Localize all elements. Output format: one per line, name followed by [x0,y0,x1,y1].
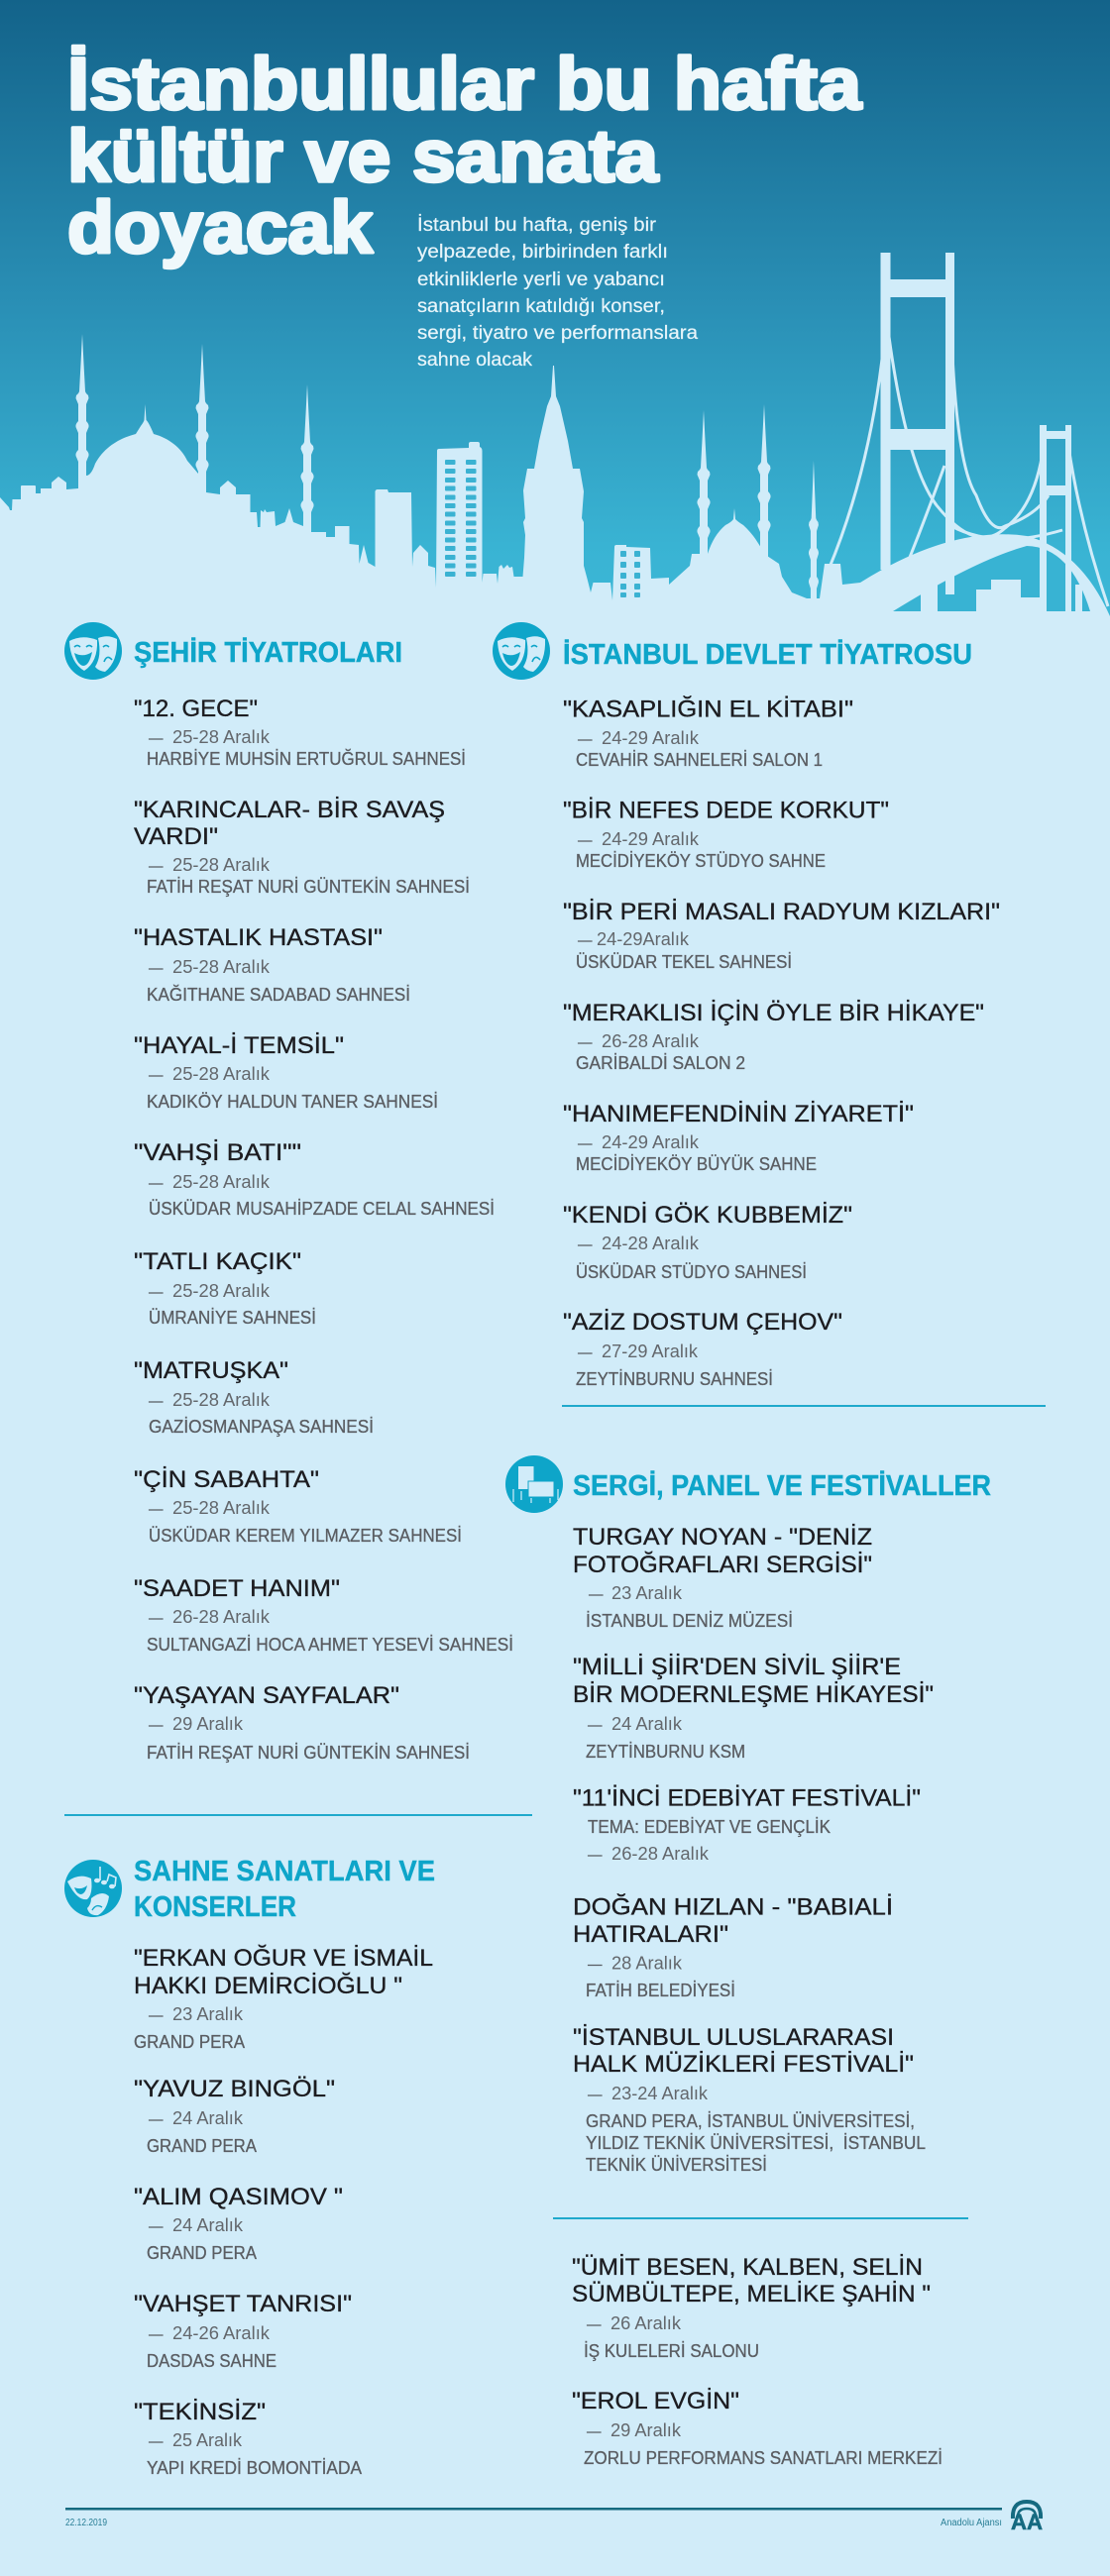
event: Doğan Hızlan [573,1894,893,2000]
icon: exhibition panels [505,1455,563,1513]
minaret 6 [809,461,819,629]
event: Vahşet Tanrısı [134,2291,352,2371]
bridge tower 2 [1040,425,1071,611]
event: Alim Qasimov: — [149,2219,164,2235]
event: Milli Şiir'den Sivil Şiir'e: 24 Aralık [611,1713,683,1734]
event: Ümit Besen: — [587,2317,602,2333]
event: Hastalık Hastası: "HASTALIK HASTASI" [134,924,383,951]
event: Saadet Hanım: — [149,1611,164,1627]
event: İstanbul Uluslararası Halk Müzikleri Festivali: HALK MÜZİKLERİ FESTİVALİ" [573,2051,914,2078]
event: Bir Peri Masalı [563,899,1000,972]
event: Vahşet Tanrısı: 24-26 Aralık [172,2322,271,2343]
heading [134,1856,435,1923]
event: Erkan Oğur: "ERKAN OĞUR VE İSMAİL [134,1945,433,1972]
event: Meraklısı İçin [563,1000,984,1073]
event: Erkan Oğur: 23 Aralık [172,2003,244,2024]
buildings under the arch [921,567,1082,611]
event: 11'inci Edebiyat Festivali: — [588,1848,603,1864]
event: Erkan Oğur: — [149,2008,164,2024]
event: Alim Qasimov: 24 Aralık [172,2214,244,2235]
intro text [417,215,698,371]
event: Vahşet Tanrısı: "VAHŞET TANRISI" [134,2291,352,2317]
event: Hayal-i Temsil: "HAYAL-İ TEMSİL" [134,1032,344,1059]
event: Karıncalar: VARDI" [134,823,218,850]
icon: masks and music notes [64,1860,122,1917]
event: Hayal-i Temsil: KADIKÖY HALDUN TANER SAHNESİ [147,1092,438,1112]
event: 11'inci Edebiyat Festivali: TEMA: EDEBİYAT VE GENÇLİK [588,1817,831,1837]
heading: SAHNE SANATLARI VE [134,1856,435,1887]
event: Hanımefendinin Ziyareti: MECİDİYEKÖY BÜYÜK SAHNE [576,1154,817,1174]
event: Saadet Hanım: 26-28 Aralık [172,1606,271,1627]
event: Ümit Besen [572,2254,931,2361]
event: Matruşka [134,1357,374,1437]
event: Kendi Gök Kubbemiz [563,1202,852,1282]
event: 12. Gece: 25-28 Aralık [172,726,271,747]
event: Meraklısı İçin: GARİBALDİ SALON 2 [576,1053,745,1073]
minaret 2 [196,344,208,512]
event: Ümit Besen: 26 Aralık [610,2312,682,2333]
event: Tekinsiz: — [149,2434,164,2450]
icon: theatre masks [493,622,550,680]
event: Tatlı Kaçık [134,1248,316,1328]
event: İstanbul Uluslararası Halk Müzikleri Festivali: — [588,2088,603,2103]
event: Erkan Oğur [134,1945,433,2052]
event: 11'inci Edebiyat Festivali [573,1785,921,1864]
panel: Sahne Sanatları ve Konserler [64,1856,435,2478]
event: Çin Sabahta [134,1466,462,1546]
intro text: sahne olacak [417,350,533,371]
event: 12. Gece: "12. GECE" [134,696,258,722]
footer [65,2502,1043,2534]
title [67,43,862,268]
event: Erol Evgin: — [587,2424,602,2440]
minaret 1 [75,334,89,502]
event: Doğan Hızlan: DOĞAN HIZLAN - "BABIALİ [573,1894,893,1920]
event: Turgay Noyan: İSTANBUL DENİZ MÜZESİ [586,1611,793,1631]
event: Alim Qasimov: GRAND PERA [147,2243,257,2263]
event: Karıncalar: 25-28 Aralık [172,854,271,875]
event: Vahşi Batı: — [149,1176,164,1192]
event: İstanbul Uluslararası Halk Müzikleri Festivali: 23-24 Aralık [611,2083,709,2103]
event: Bir Peri Masalı: ÜSKÜDAR TEKEL SAHNESİ [576,952,792,972]
event: Bir Nefes Dede Korkut: 24-29 Aralık [602,828,700,849]
event: Hastalık Hastası: KAĞITHANE SADABAD SAHNESİ [147,984,410,1005]
event: Milli Şiir'den Sivil Şiir'e [573,1654,934,1762]
heading: İSTANBUL DEVLET TİYATROSU [563,639,972,671]
event: Yavuz Bingöl: 24 Aralık [172,2107,244,2128]
event: Hastalık Hastası: — [149,961,164,977]
event: Kasaplığın El Kitabı: "KASAPLIĞIN EL KİTABI" [563,696,853,723]
event: Bir Peri Masalı: 24-29Aralık [597,928,690,949]
event: Hanımefendinin Ziyareti: 24-29 Aralık [602,1131,700,1152]
event: Ümit Besen: İŞ KULELERİ SALONU [584,2341,759,2361]
event: Bir Peri Masalı: — [578,933,593,949]
event: Hayal-i Temsil: — [149,1068,164,1084]
event: Hayal-i Temsil: 25-28 Aralık [172,1063,271,1084]
event: Yavuz Bingöl: — [149,2112,164,2128]
event: Tatlı Kaçık: 25-28 Aralık [172,1280,271,1301]
title: kültür ve sanata [67,115,659,197]
event: Vahşi Batı [134,1139,495,1219]
event: Matruşka: 25-28 Aralık [172,1389,271,1410]
event: Milli Şiir'den Sivil Şiir'e: BİR MODERNLEŞME HİKAYESİ" [573,1681,934,1708]
event: Tekinsiz: 25 Aralık [172,2429,243,2450]
heading: SERGİ, PANEL VE FESTİVALLER [573,1470,991,1502]
event: Bir Nefes Dede Korkut: — [578,833,593,849]
event: Karıncalar [134,797,470,897]
event: Yavuz Bingöl: GRAND PERA [147,2136,257,2156]
event: Saadet Hanım: SULTANGAZİ HOCA AHMET YESEVİ SAHNESİ [147,1635,513,1655]
event: Tatlı Kaçık: ÜMRANİYE SAHNESİ [149,1308,316,1328]
event: Vahşi Batı: ÜSKÜDAR MUSAHİPZADE CELAL SAHNESİ [149,1199,495,1219]
skyline silhouette [0,366,1110,634]
event: Aziz Dostum Çehov: — [578,1345,593,1361]
event: Hanımefendinin Ziyareti: — [578,1136,593,1152]
event: Meraklısı İçin: — [578,1035,593,1051]
event: Kendi Gök Kubbemiz: 24-28 Aralık [602,1233,700,1253]
event: Aziz Dostum Çehov: 27-29 Aralık [602,1341,699,1361]
event: Aziz Dostum Çehov: ZEYTİNBURNU SAHNESİ [576,1369,773,1389]
event: Erol Evgin: ZORLU PERFORMANS SANATLARI MERKEZİ [584,2448,943,2468]
event: Matruşka: "MATRUŞKA" [134,1357,288,1384]
event: Tekinsiz: YAPI KREDİ BOMONTİADA [147,2458,362,2478]
minaret 3 [301,384,313,553]
event: Turgay Noyan: 23 Aralık [611,1582,683,1603]
event: Yaşayan Sayfalar: — [149,1718,164,1734]
event: Karıncalar: "KARINCALAR- BİR SAVAŞ [134,797,445,823]
tower block windows [445,460,640,597]
event: Yavuz Bingöl [134,2076,335,2156]
intro text: İstanbul bu hafta, geniş bir [417,215,657,236]
event: Turgay Noyan: FOTOĞRAFLARI SERGİSİ" [573,1552,872,1578]
event: Matruşka: — [149,1394,164,1410]
event: Karıncalar: — [149,859,164,875]
event: Aziz Dostum Çehov: "AZİZ DOSTUM ÇEHOV" [563,1309,842,1336]
event: Kendi Gök Kubbemiz: "KENDİ GÖK KUBBEMİZ" [563,1202,852,1229]
event: Kasaplığın El Kitabı: — [578,732,593,748]
event: Turgay Noyan [573,1524,872,1631]
event: 12. Gece: — [149,731,164,747]
intro text: etkinliklerle yerli ve yabancı [417,269,665,290]
event: İstanbul Uluslararası Halk Müzikleri Festivali [573,2024,926,2175]
event: Hastalık Hastası [134,924,410,1005]
arch opening under bridge approach [893,546,1090,611]
event: Kendi Gök Kubbemiz: — [578,1237,593,1253]
event: Tekinsiz: "TEKİNSİZ" [134,2399,266,2425]
event: 12. Gece: HARBİYE MUHSİN ERTUĞRUL SAHNESİ [147,748,466,769]
event: Yaşayan Sayfalar [134,1682,470,1763]
event: Çin Sabahta: — [149,1502,164,1518]
event: Yavuz Bingöl: "YAVUZ BINGÖL" [134,2076,335,2102]
event: 12. Gece [134,696,466,769]
event: Saadet Hanım: "SAADET HANIM" [134,1575,340,1602]
heading: KONSERLER [134,1891,296,1923]
event: Doğan Hızlan: HATIRALARI" [573,1921,728,1948]
event: Milli Şiir'den Sivil Şiir'e: — [588,1718,603,1734]
event: Hanımefendinin Ziyareti: "HANIMEFENDİNİN ZİYARETİ" [563,1101,914,1127]
minaret 4 [698,410,710,579]
event: Bir Peri Masalı: "BİR PERİ MASALI RADYUM KIZLARI" [563,899,1000,925]
event: Yaşayan Sayfalar: "YAŞAYAN SAYFALAR" [134,1682,399,1709]
icon: AA logo: AA [1011,2510,1043,2534]
event: Ümit Besen: "ÜMİT BESEN, KALBEN, SELİN [572,2254,923,2281]
event: Doğan Hızlan: — [588,1958,603,1974]
event: Vahşi Batı: "VAHŞİ BATI"" [134,1139,301,1166]
event: Milli Şiir'den Sivil Şiir'e: ZEYTİNBURNU KSM [586,1742,745,1762]
event: Vahşi Batı: 25-28 Aralık [172,1171,271,1192]
event: İstanbul Uluslararası Halk Müzikleri Festivali: GRAND PERA, İSTANBUL ÜNİVERSİTESİ, [586,2111,915,2131]
event: Çin Sabahta: "ÇİN SABAHTA" [134,1466,319,1493]
heading: ŞEHİR TİYATROLARI [134,637,402,669]
event: Bir Nefes Dede Korkut: MECİDİYEKÖY STÜDYO SAHNE [576,851,826,871]
event: Tatlı Kaçık: "TATLI KAÇIK" [134,1248,301,1275]
event: İstanbul Uluslararası Halk Müzikleri Festivali: "İSTANBUL ULUSLARARASI [573,2024,894,2051]
event: Bir Nefes Dede Korkut [563,797,889,871]
event: Doğan Hızlan: FATİH BELEDİYESİ [586,1981,735,2000]
event: Turgay Noyan: TURGAY NOYAN - "DENİZ [573,1524,872,1551]
event: Karıncalar: FATİH REŞAT NURİ GÜNTEKİN SAHNESİ [147,877,470,897]
event: Milli Şiir'den Sivil Şiir'e: "MİLLİ ŞİİR'DEN SİVİL ŞİİR'E [573,1654,901,1680]
event: Kendi Gök Kubbemiz: ÜSKÜDAR STÜDYO SAHNESİ [576,1262,807,1282]
panel: Sergi, Panel ve Festivaller [505,1455,991,2175]
panel: Şehir Tiyatroları [64,622,513,1763]
event: Doğan Hızlan: 28 Aralık [611,1952,683,1974]
event: Ümit Besen: SÜMBÜLTEPE, MELİKE ŞAHİN " [572,2281,931,2308]
intro text: sanatçıların katıldığı konser, [417,296,665,317]
event: Vahşet Tanrısı: — [149,2327,164,2343]
minaret 5 [757,404,771,573]
event: Kasaplığın El Kitabı: 24-29 Aralık [602,727,700,748]
event: Çin Sabahta: 25-28 Aralık [172,1497,271,1518]
event: Hanımefendinin Ziyareti [563,1101,914,1174]
event: 11'inci Edebiyat Festivali: 26-28 Aralık [611,1843,710,1864]
event: Vahşet Tanrısı: DASDAS SAHNE [147,2351,277,2371]
event: Tekinsiz [134,2399,362,2478]
icon: theatre masks [64,622,122,680]
event: Meraklısı İçin: 26-28 Aralık [602,1030,700,1051]
event: Saadet Hanım [134,1575,513,1655]
event: Kasaplığın El Kitabı [563,696,853,770]
title: İstanbullular bu hafta [67,43,862,125]
event: Yaşayan Sayfalar: 29 Aralık [172,1713,244,1734]
bridge tower 1 [880,253,954,594]
panel: İstanbul Devlet Tiyatrosu [493,622,1000,1389]
event: Hastalık Hastası: 25-28 Aralık [172,956,271,977]
credit: Anadolu Ajansı [941,2518,1002,2528]
intro text: yelpazede, birbirinden farklı [417,242,668,263]
event: Erol Evgin: "EROL EVGİN" [572,2388,739,2415]
event: Meraklısı İçin: "MERAKLISI İÇİN ÖYLE BİR HİKAYE" [563,1000,984,1026]
event: Alim Qasimov [134,2184,343,2263]
event: İstanbul Uluslararası Halk Müzikleri Festivali: YILDIZ TEKNİK ÜNİVERSİTESİ, İSTANBUL [586,2133,926,2153]
event: Çin Sabahta: ÜSKÜDAR KEREM YILMAZER SAHNESİ [149,1526,462,1546]
event: Alim Qasimov: "ALIM QASIMOV " [134,2184,343,2210]
event: Erkan Oğur: HAKKI DEMİRCİOĞLU " [134,1973,402,1999]
date: 22.12.2019 [65,2518,107,2528]
event: Tatlı Kaçık: — [149,1285,164,1301]
event: İstanbul Uluslararası Halk Müzikleri Festivali: TEKNİK ÜNİVERSİTESİ [586,2155,767,2175]
event: Kasaplığın El Kitabı: CEVAHİR SAHNELERİ SALON 1 [576,750,823,770]
intro text: sergi, tiyatro ve performanslara [417,323,698,344]
panel: concerts continued [572,2254,943,2468]
bridge cables [829,332,1108,606]
event: Erkan Oğur: GRAND PERA [134,2032,245,2052]
event: Bir Nefes Dede Korkut: "BİR NEFES DEDE KORKUT" [563,797,889,824]
header sky gradient [0,0,1110,619]
event: 11'inci Edebiyat Festivali: "11'İNCİ EDEBİYAT FESTİVALİ" [573,1785,921,1811]
title: doyacak [67,186,374,268]
event: Matruşka: GAZİOSMANPAŞA SAHNESİ [149,1417,374,1437]
event: Hayal-i Temsil [134,1032,438,1112]
event: Erol Evgin [572,2388,943,2468]
event: Erol Evgin: 29 Aralık [610,2419,682,2440]
event: Turgay Noyan: — [589,1587,604,1603]
illustration: Istanbul skyline [0,253,1110,634]
event: Yaşayan Sayfalar: FATİH REŞAT NURİ GÜNTEKİN SAHNESİ [147,1743,470,1763]
event: Aziz Dostum Çehov [563,1309,842,1389]
